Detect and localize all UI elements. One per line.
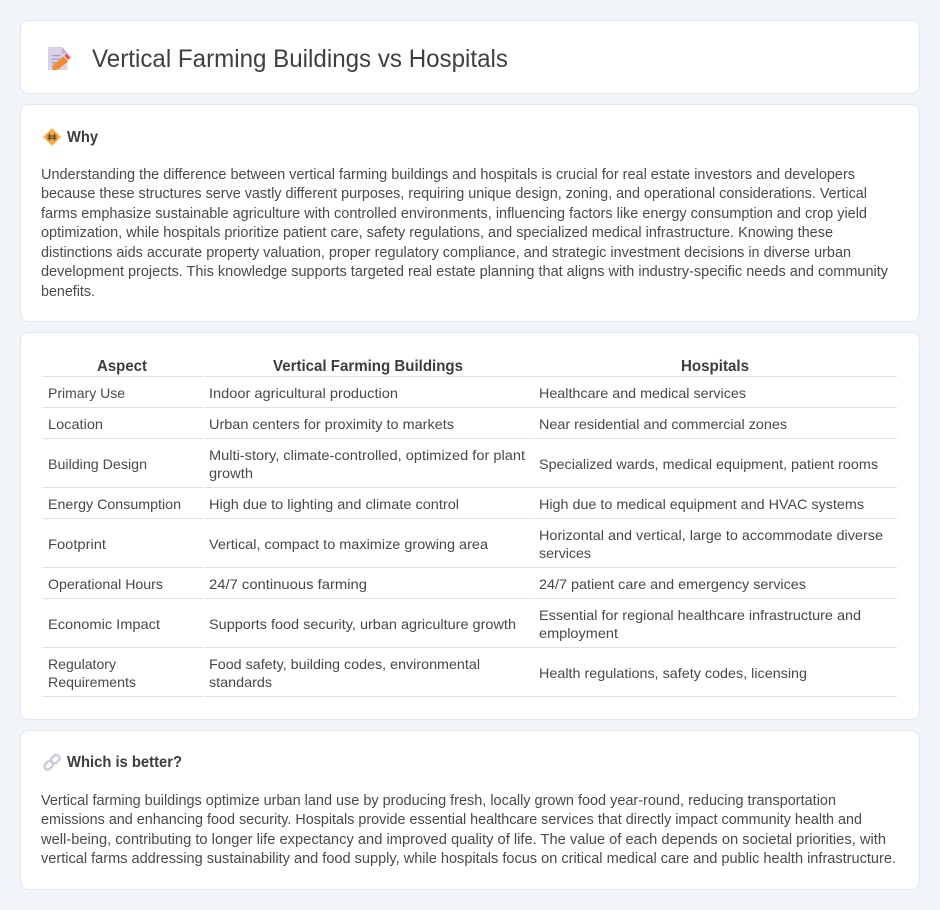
text block: which is better paragraph: well-being, contributing to longer life expectancy and improved quality of life. The value of each depends on societal priorities, with bbox=[40, 832, 886, 848]
row: operational hours: 24/7 patient care and emergency services bbox=[539, 576, 806, 592]
row: primary use: Primary Use bbox=[48, 385, 125, 401]
row: energy consumption: Energy Consumption bbox=[48, 496, 181, 512]
row: building design: growth bbox=[209, 465, 253, 481]
text block: why paragraph: farms emphasize sustainable agriculture with controlled environments, influencing factors like energy consumption and crop yield bbox=[41, 206, 867, 222]
row: primary use: Healthcare and medical services bbox=[539, 385, 746, 401]
row: building design: Specialized wards, medical equipment, patient rooms bbox=[539, 456, 878, 472]
row: operational hours bbox=[48, 576, 806, 592]
icon: document with pencil bbox=[48, 47, 70, 70]
panel: title header bbox=[20, 20, 920, 94]
row: location: Near residential and commercial zones bbox=[539, 416, 787, 432]
row: energy consumption: High due to medical equipment and HVAC systems bbox=[539, 496, 864, 512]
row: regulatory requirements: Regulatory bbox=[48, 656, 116, 672]
panel: why bbox=[20, 104, 920, 322]
text block: why paragraph: optimization, while hospitals prioritize patient care, safety regulations, and specialized medical infrastructure. Knowing these bbox=[41, 225, 833, 241]
row: regulatory requirements: Requirements bbox=[48, 674, 136, 690]
table header row bbox=[97, 358, 749, 375]
row: regulatory requirements: standards bbox=[209, 674, 272, 690]
row: location bbox=[48, 416, 787, 432]
row: economic impact: Essential for regional healthcare infrastructure and bbox=[539, 607, 861, 623]
row: building design: Building Design bbox=[48, 456, 147, 472]
title: Vertical Farming Buildings vs Hospitals bbox=[92, 45, 508, 73]
row: economic impact: Supports food security, urban agriculture growth bbox=[209, 616, 516, 632]
panel: comparison table bbox=[20, 332, 920, 720]
text block: which is better paragraph bbox=[40, 793, 896, 867]
text block: why paragraph: Understanding the difference between vertical farming buildings and hospitals is crucial for real estate investors and developers bbox=[41, 167, 855, 183]
text block: why paragraph: development projects. This knowledge supports targeted real estate planning that aligns with industry-specific needs and community bbox=[41, 264, 889, 280]
text block: why paragraph: because these structures serve vastly different purposes, requiring unique design, zoning, and operational considerations. Vertical bbox=[41, 186, 867, 202]
text block: which is better paragraph: Vertical farming buildings optimize urban land use by producing fresh, locally grown food year-round, reducing transportation bbox=[41, 793, 836, 809]
row: operational hours: Operational Hours bbox=[48, 576, 163, 592]
row: regulatory requirements bbox=[48, 656, 807, 690]
panel: which is better bbox=[20, 730, 920, 890]
row: primary use: Indoor agricultural production bbox=[209, 385, 398, 401]
icon: warning diamond bbox=[44, 128, 60, 146]
row: economic impact: Economic Impact bbox=[48, 616, 160, 632]
text block: which is better paragraph: vertical farms addressing sustainability and food supply, while hospitals focus on critical medical care and public health infrastructure. bbox=[41, 851, 896, 867]
row: footprint: Horizontal and vertical, large to accommodate diverse bbox=[539, 527, 883, 543]
text block: which is better paragraph: emissions and enhancing food security. Hospitals provide essential healthcare services that directly impact community health and bbox=[41, 812, 862, 828]
row: economic impact bbox=[48, 607, 861, 641]
row: regulatory requirements: Health regulations, safety codes, licensing bbox=[539, 665, 807, 681]
row: building design bbox=[48, 447, 878, 481]
row: building design: Multi-story, climate-controlled, optimized for plant bbox=[209, 447, 525, 463]
row: energy consumption bbox=[48, 496, 864, 512]
row: regulatory requirements: Food safety, building codes, environmental bbox=[209, 656, 480, 672]
icon: chain link bbox=[43, 754, 61, 771]
row: energy consumption: High due to lighting and climate control bbox=[209, 496, 459, 512]
heading: why: Why bbox=[67, 129, 98, 146]
text block: why paragraph: benefits. bbox=[41, 284, 95, 300]
row: location: Location bbox=[48, 416, 103, 432]
table header row: Vertical Farming Buildings bbox=[273, 358, 463, 375]
row: footprint: Footprint bbox=[48, 536, 106, 552]
row: economic impact: employment bbox=[539, 625, 618, 641]
row: footprint: services bbox=[539, 545, 591, 561]
text block: why paragraph: distinctions aids accurate property valuation, proper regulatory compliance, and strategic investment decisions in diverse urban bbox=[41, 245, 851, 261]
table header row: Aspect bbox=[97, 358, 148, 375]
row: footprint: Vertical, compact to maximize growing area bbox=[209, 536, 488, 552]
row: primary use bbox=[48, 385, 746, 401]
heading: which is better: Which is better? bbox=[67, 754, 182, 771]
table header row: Hospitals bbox=[681, 358, 749, 375]
row: operational hours: 24/7 continuous farming bbox=[209, 576, 367, 592]
row: location: Urban centers for proximity to markets bbox=[209, 416, 454, 432]
row: footprint bbox=[48, 527, 883, 561]
text block: why paragraph bbox=[41, 167, 889, 300]
